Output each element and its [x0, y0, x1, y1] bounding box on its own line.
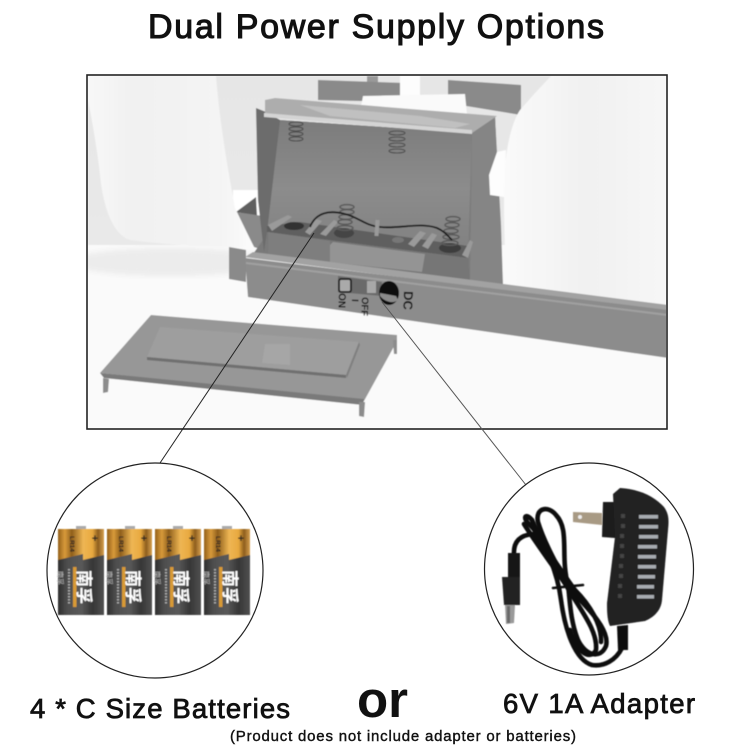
- panel: product photo: OFF: [358, 297, 370, 316]
- panel: product photo: I: [349, 299, 360, 302]
- lower springs: [337, 205, 460, 245]
- label: adapter: 6V 1A Adapter: [503, 688, 695, 719]
- icon: battery 2: 南孚: [123, 570, 142, 604]
- label: batteries: 4 * C Size Batteries: [30, 693, 290, 724]
- icon: DC plug: [502, 553, 520, 624]
- battery box side and back walls: [254, 120, 472, 280]
- icon: battery 2: +: [141, 533, 147, 545]
- icon: battery 1: +: [92, 533, 98, 545]
- switch labels: DC: [400, 291, 416, 311]
- icon: battery 1: 南孚: [56, 571, 65, 585]
- title: Dual Power Supply Options: [148, 8, 604, 46]
- leader line to batteries: [160, 233, 314, 463]
- battery box top lid: [265, 98, 497, 133]
- rear parts: [367, 76, 378, 82]
- top springs: [289, 122, 405, 153]
- leader line to adapter: [382, 302, 526, 485]
- icon: battery 1: LR14: [68, 536, 75, 552]
- icon: cable: [514, 509, 622, 665]
- icon: battery 4: 南孚: [202, 571, 211, 585]
- strain relief: [617, 625, 628, 650]
- icon: battery 1: 南孚: [74, 570, 93, 604]
- panel: batteries circle: [47, 463, 263, 678]
- right tank: [504, 76, 666, 308]
- panel: adapter circle: [484, 463, 694, 675]
- icon: battery 3: LR14: [165, 536, 172, 552]
- icon: battery 3: +: [189, 533, 195, 545]
- icon: battery 2: [105, 526, 152, 615]
- wire: [310, 212, 452, 240]
- icon: battery 4: [202, 526, 250, 615]
- icon: battery 2: LR14: [117, 536, 124, 552]
- photo border: [87, 75, 667, 429]
- icon: battery 4: LR14: [214, 536, 221, 552]
- footnote: (Product does not include adapter or batteries): [230, 728, 576, 745]
- switch slot and DC jack: [338, 276, 382, 296]
- icon: battery 4: +: [238, 533, 244, 545]
- gray bracket left: [236, 197, 257, 216]
- icon: battery 4: 南孚: [220, 570, 239, 604]
- icon: battery 1: [56, 526, 104, 615]
- contact floor: [267, 222, 468, 258]
- icon: battery 3: 南孚: [153, 571, 162, 585]
- panel: product photo: [70, 75, 668, 429]
- removed battery cover: [100, 315, 397, 401]
- panel: product photo: ON: [335, 293, 347, 308]
- icon: battery 2: 南孚: [105, 571, 114, 585]
- icon: battery 3: [153, 526, 201, 615]
- front bar: [245, 252, 668, 312]
- label: or: or: [357, 671, 408, 728]
- left tank: [88, 76, 254, 247]
- icon: battery 3: 南孚: [171, 570, 190, 604]
- icon: adapter body: [573, 488, 669, 650]
